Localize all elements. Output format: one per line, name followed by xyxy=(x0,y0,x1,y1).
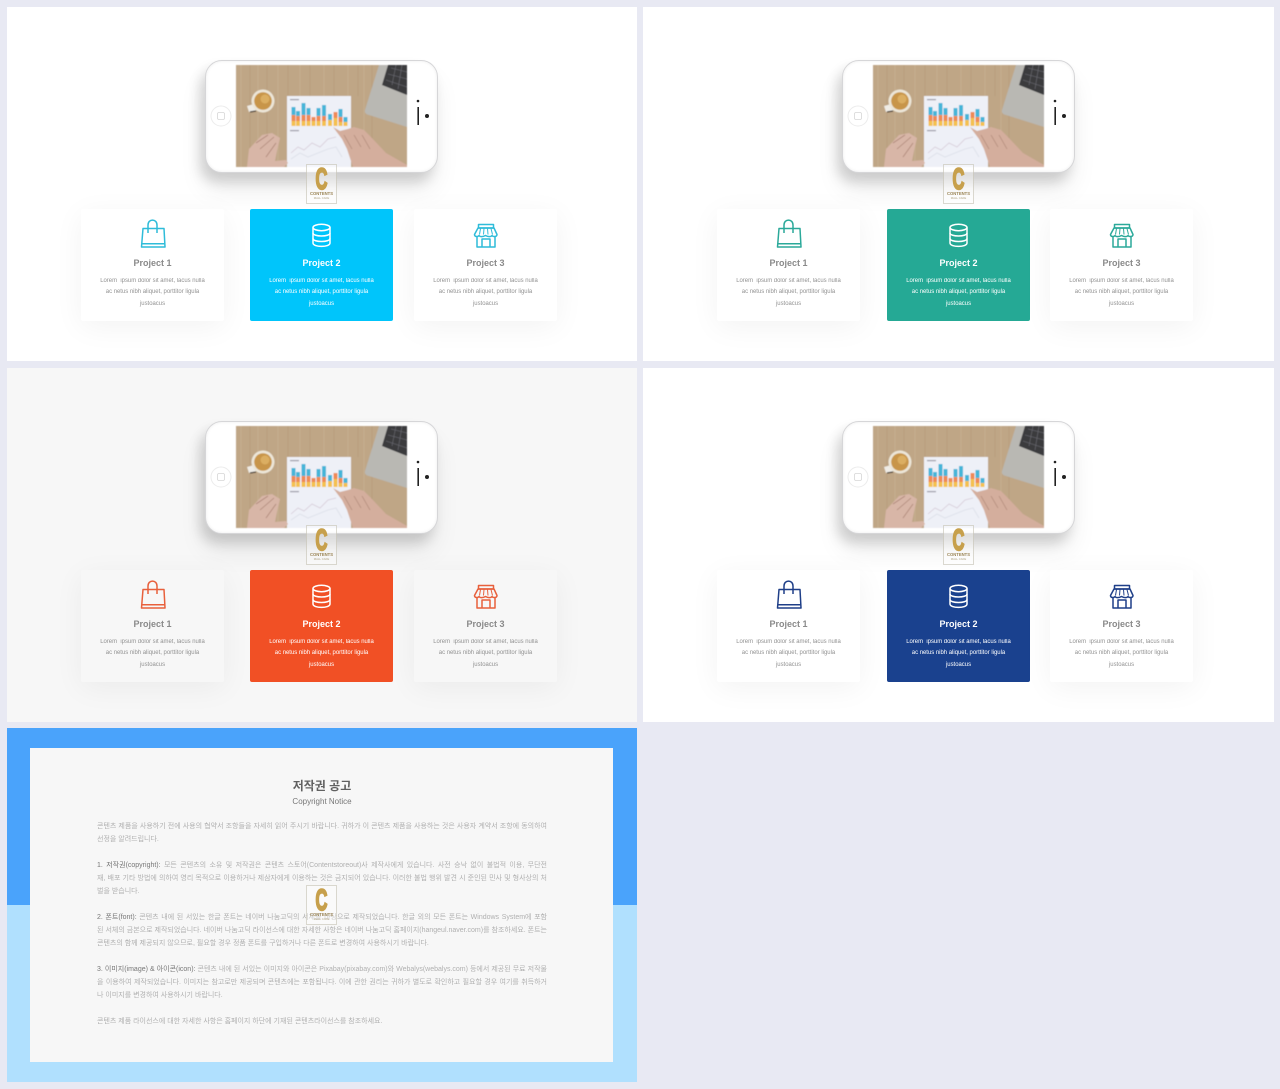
card: project 3: Project 3 xyxy=(466,258,505,268)
card: project 2 highlighted: Project 2 xyxy=(302,618,341,628)
card: project 1: Project 1 xyxy=(133,618,172,628)
card: project 3: ac netus nibh aliquet, porttitor ligula xyxy=(1075,650,1168,656)
card: project 3 xyxy=(414,209,557,321)
card: project 2 highlighted xyxy=(250,570,393,682)
card: project 2 highlighted: justoacus xyxy=(309,301,334,307)
card: project 2 highlighted: Lorem ipsum dolor sit amet, lacus nulla xyxy=(269,638,374,644)
card: project 3: justoacus xyxy=(1109,662,1134,668)
notice title: 저작권 공고 xyxy=(293,779,351,793)
card: project 2 highlighted: Project 2 xyxy=(302,258,341,268)
watermark logo: CONTENTS xyxy=(947,191,970,196)
card: project 2 highlighted: ac netus nibh aliquet, porttitor ligula xyxy=(912,650,1005,656)
watermark logo xyxy=(306,885,337,925)
card: project 3: justoacus xyxy=(473,662,498,668)
card: project 1: ac netus nibh aliquet, porttitor ligula xyxy=(106,289,199,295)
card: project 2 highlighted: justoacus xyxy=(309,662,334,668)
card: project 3: ac netus nibh aliquet, porttitor ligula xyxy=(439,650,532,656)
watermark logo: CONTENTS xyxy=(310,552,333,557)
section 2: font: 콘텐츠의 함께 제공되지 않으므로, 필요할 경우 정품 폰트를 구입하거나 다른 폰트로 변경하여 사용하시기 바랍니다. xyxy=(97,940,429,946)
card: project 1: justoacus xyxy=(140,662,165,668)
watermark logo: MALL CAFE xyxy=(951,556,966,560)
watermark logo: MALL CAFE xyxy=(314,196,329,200)
section 3: image and icon: 나 이미지를 변경하여 사용하시기 바랍니다. xyxy=(97,992,223,998)
card: project 1: Lorem ipsum dolor sit amet, lacus nulla xyxy=(100,278,205,284)
card: project 3: Project 3 xyxy=(1102,258,1141,268)
card: project 2 highlighted: Project 2 xyxy=(939,618,978,628)
card: project 1: Lorem ipsum dolor sit amet, lacus nulla xyxy=(736,638,841,644)
card: project 2 highlighted: ac netus nibh aliquet, porttitor ligula xyxy=(275,650,368,656)
card: project 2 highlighted xyxy=(887,209,1030,321)
watermark logo xyxy=(943,164,974,204)
section 2: font: 2. 폰트(font): 콘텐츠 내에 된 서있는 한글 폰트는 네이버 나눔고딕의 서체를 바탕으로 제작되었습니다. 한글 외의 모든 폰트는 Windows System에 포함 xyxy=(97,914,547,920)
card: project 1: justoacus xyxy=(776,662,801,668)
card: project 3: justoacus xyxy=(473,301,498,307)
card: project 3 xyxy=(1050,570,1193,682)
card: project 2 highlighted: Lorem ipsum dolor sit amet, lacus nulla xyxy=(269,278,374,284)
panel: copyright notice slide xyxy=(7,728,637,1082)
watermark logo xyxy=(306,525,337,565)
card: project 3: justoacus xyxy=(1109,301,1134,307)
card: project 3: Lorem ipsum dolor sit amet, lacus nulla xyxy=(433,278,538,284)
card: project 1: ac netus nibh aliquet, porttitor ligula xyxy=(742,650,835,656)
card: project 2 highlighted: Lorem ipsum dolor sit amet, lacus nulla xyxy=(906,638,1011,644)
watermark logo xyxy=(306,164,337,204)
card: project 1: justoacus xyxy=(140,301,165,307)
card: project 1: Project 1 xyxy=(133,258,172,268)
card: project 3: Lorem ipsum dolor sit amet, lacus nulla xyxy=(1069,638,1174,644)
card: project 1: ac netus nibh aliquet, porttitor ligula xyxy=(742,289,835,295)
card: project 1 xyxy=(81,570,224,682)
card: project 1: Project 1 xyxy=(769,618,808,628)
notice sheet xyxy=(30,748,613,1062)
card: project 1 xyxy=(717,209,860,321)
section 1: copyright: 벌을 받습니다. xyxy=(97,888,140,894)
closing line: 콘텐츠 제품 라이선스에 대한 자세한 사항은 홈페이지 하단에 기재된 콘텐츠라이선스를 참조하세요. xyxy=(97,1018,382,1024)
section 3: image and icon xyxy=(97,965,547,998)
card: project 3 xyxy=(414,570,557,682)
watermark logo xyxy=(943,525,974,565)
card: project 1: Lorem ipsum dolor sit amet, lacus nulla xyxy=(736,278,841,284)
watermark logo: C xyxy=(316,884,327,917)
card: project 2 highlighted: Lorem ipsum dolor sit amet, lacus nulla xyxy=(906,278,1011,284)
card: project 1: justoacus xyxy=(776,301,801,307)
intro paragraph: 콘텐츠 제품을 사용하기 전에 사용의 협약서 조항들을 자세히 읽어 주시기 바랍니다. 귀하가 이 콘텐츠 제품을 사용하는 것은 사용자 계약서 조항에 동의하여 xyxy=(97,822,547,830)
watermark logo: MALL CAFE xyxy=(951,196,966,200)
card: project 2 highlighted xyxy=(887,570,1030,682)
card: project 2 highlighted: ac netus nibh aliquet, porttitor ligula xyxy=(912,289,1005,295)
watermark logo: CONTENTS xyxy=(310,191,333,196)
watermark logo: C xyxy=(953,163,964,196)
card: project 2 highlighted: ac netus nibh aliquet, porttitor ligula xyxy=(275,289,368,295)
watermark logo: CONTENTS xyxy=(310,912,333,917)
card: project 1 xyxy=(81,209,224,321)
card: project 2 highlighted: Project 2 xyxy=(939,258,978,268)
section 2: font: 된 서체의 금본으로 제작되었습니다. 네이버 나눔고딕 라이선스에 대한 자세한 사항은 네이버 나눔고딕 홈페이지(hangeul.naver.com)를 참조하세요. 폰트는 xyxy=(97,926,547,934)
section 3: image and icon: 을 이용하여 제작되었습니다. 이미지는 참고로만 제공되며 콘텐츠에는 포함됩니다. 이에 관한 권리는 귀하가 별도로 확인하고 필요할 경우 여기를 취득하거 xyxy=(97,978,547,986)
card: project 3 xyxy=(1050,209,1193,321)
card: project 2 highlighted: justoacus xyxy=(946,301,971,307)
card: project 2 highlighted: justoacus xyxy=(946,662,971,668)
panel: navy project slide xyxy=(643,368,1274,722)
watermark logo: C xyxy=(316,163,327,196)
card: project 3: ac netus nibh aliquet, porttitor ligula xyxy=(1075,289,1168,295)
notice subtitle: Copyright Notice xyxy=(292,796,352,806)
phone mockup with desk photo xyxy=(842,421,1075,534)
watermark logo: C xyxy=(953,524,964,557)
section 2: font xyxy=(97,913,547,946)
phone mockup with desk photo xyxy=(842,60,1075,173)
section 1: copyright xyxy=(97,861,547,894)
watermark logo: C xyxy=(316,524,327,557)
panel: teal project slide xyxy=(643,7,1274,361)
watermark logo: MALL CAFE xyxy=(314,556,329,560)
phone mockup with desk photo xyxy=(205,421,438,534)
card: project 3: ac netus nibh aliquet, porttitor ligula xyxy=(439,289,532,295)
card: project 1: Project 1 xyxy=(769,258,808,268)
card: project 3: Project 3 xyxy=(1102,618,1141,628)
card: project 1: ac netus nibh aliquet, porttitor ligula xyxy=(106,650,199,656)
panel: orange project slide xyxy=(7,368,637,722)
panel: blue project slide xyxy=(7,7,637,361)
watermark logo: MALL CAFE xyxy=(314,916,329,920)
card: project 2 highlighted xyxy=(250,209,393,321)
section 1: copyright: 재, 배포 기타 방법에 의하여 영리 목적으로 이용하거나 제삼자에게 이용하는 것은 금지되어 있습니다. 이러한 불법 행위 발견 시 준인된 민사 및 형사상의 처 xyxy=(97,874,547,882)
card: project 1 xyxy=(717,570,860,682)
card: project 3: Lorem ipsum dolor sit amet, lacus nulla xyxy=(433,638,538,644)
watermark logo: CONTENTS xyxy=(947,552,970,557)
section 3: image and icon: 3. 이미지(image) & 아이콘(icon): 콘텐츠 내에 된 서있는 이미지와 아이콘은 Pixabay(pixabay.com)와 Webalys(webalys.com) 등에서 제공된 무료 저작물 xyxy=(97,966,547,972)
section 1: copyright: 1. 저작권(copyright): 모든 콘텐츠의 소유 및 저작권은 콘텐츠 스토어(Contentstoreout)사 제작사에게 있습니다. 사전 승낙 없이 불법적 이용, 무단전 xyxy=(97,862,547,868)
phone mockup with desk photo xyxy=(205,60,438,173)
card: project 3: Project 3 xyxy=(466,618,505,628)
intro paragraph xyxy=(97,822,547,842)
card: project 1: Lorem ipsum dolor sit amet, lacus nulla xyxy=(100,638,205,644)
intro paragraph: 선정을 알려드립니다. xyxy=(97,836,159,842)
card: project 3: Lorem ipsum dolor sit amet, lacus nulla xyxy=(1069,278,1174,284)
